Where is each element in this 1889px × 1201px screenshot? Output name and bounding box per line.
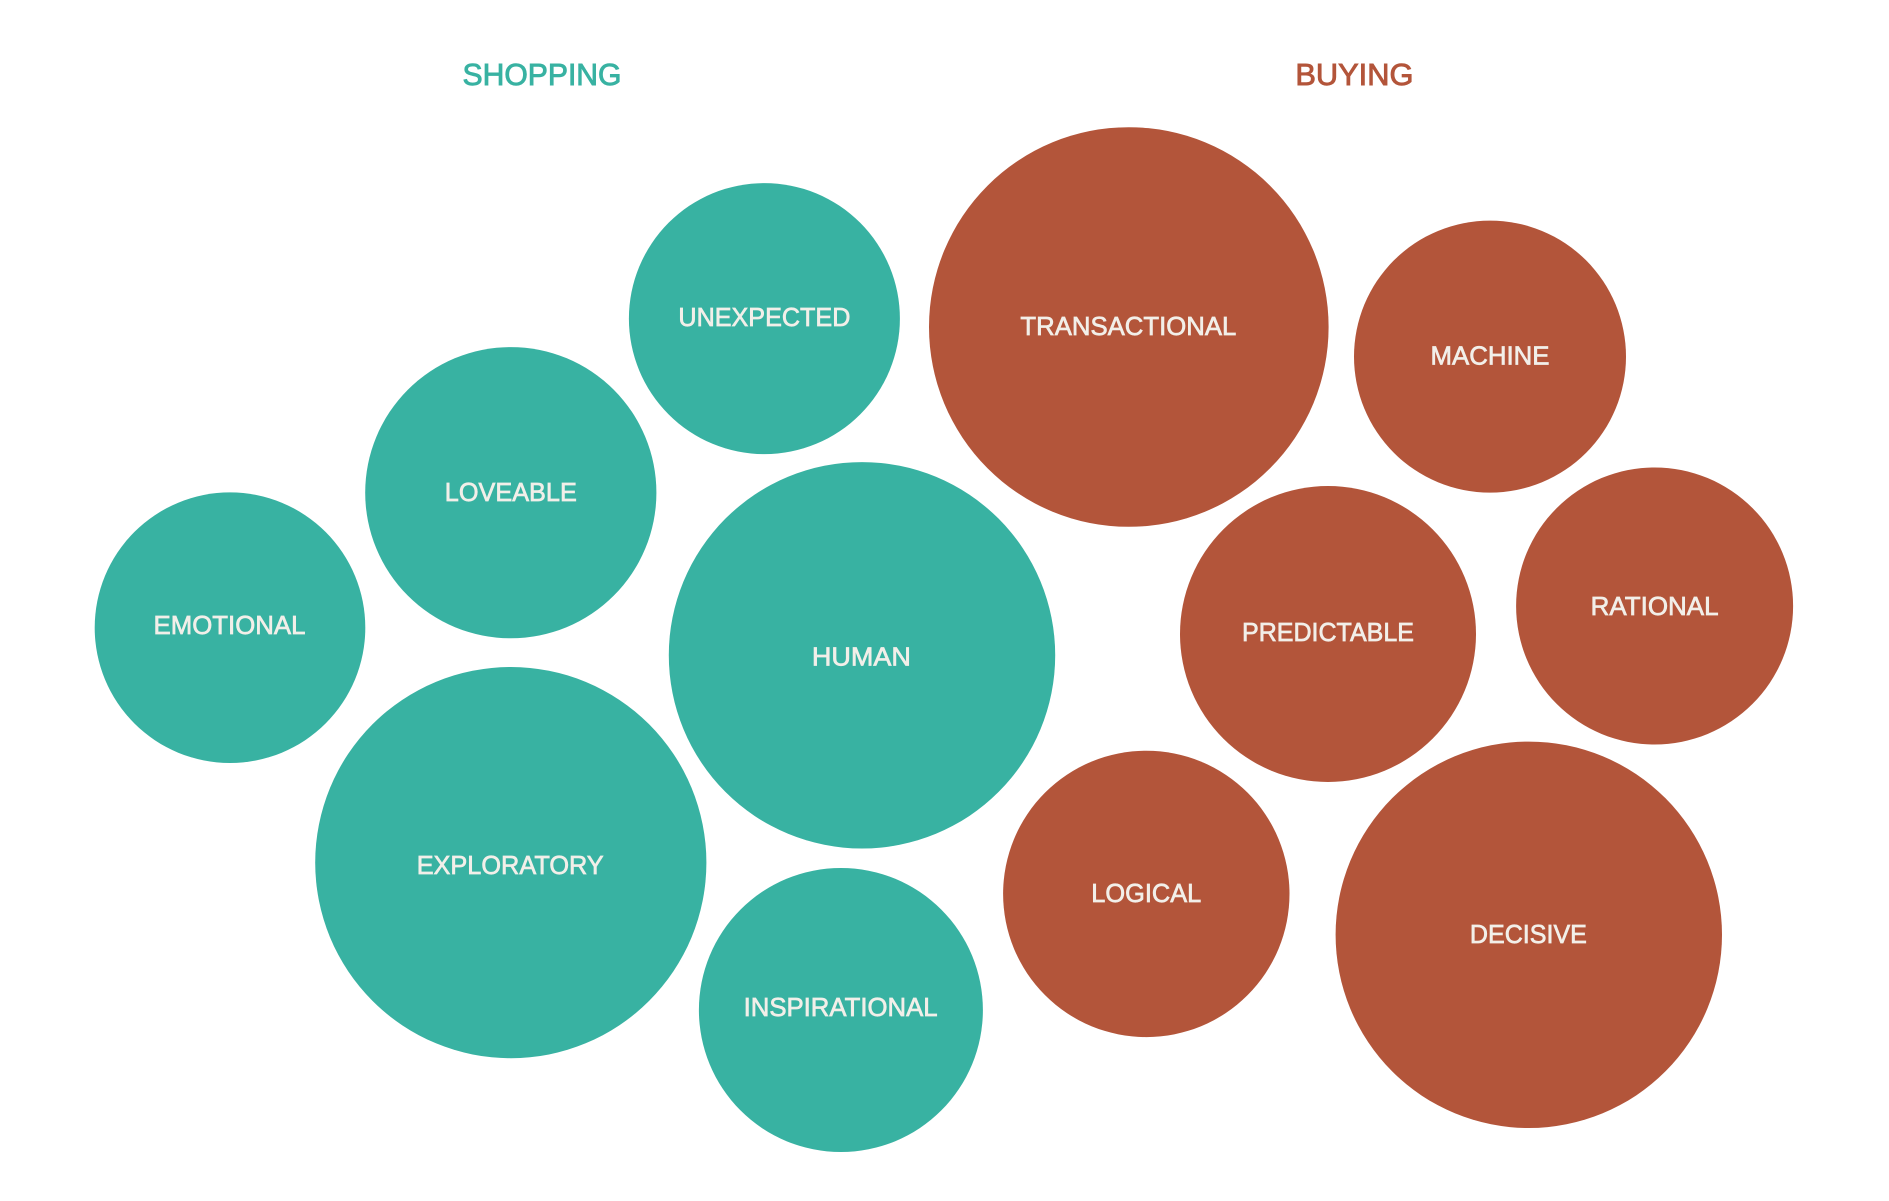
bubble: transactional bbox=[929, 127, 1329, 527]
bubble: decisive: DECISIVE bbox=[1470, 919, 1587, 949]
bubble: emotional: EMOTIONAL bbox=[154, 610, 306, 640]
bubble: transactional: TRANSACTIONAL bbox=[1020, 311, 1236, 341]
bubble: unexpected: UNEXPECTED bbox=[678, 302, 850, 332]
bubble: unexpected bbox=[629, 183, 900, 454]
bubble: inspirational: INSPIRATIONAL bbox=[744, 992, 938, 1022]
bubble: logical: LOGICAL bbox=[1091, 878, 1201, 908]
bubble: rational: RATIONAL bbox=[1591, 591, 1719, 621]
bubble: inspirational bbox=[699, 868, 983, 1152]
bubble: human: HUMAN bbox=[812, 642, 911, 672]
bubble: loveable bbox=[365, 347, 656, 638]
bubble: exploratory bbox=[315, 667, 706, 1058]
bubble: machine: MACHINE bbox=[1430, 340, 1550, 370]
bubble: rational bbox=[1516, 468, 1793, 744]
bubble: predictable: PREDICTABLE bbox=[1242, 617, 1414, 647]
bubble: emotional bbox=[95, 492, 365, 763]
heading: buying: BUYING bbox=[1295, 57, 1413, 92]
bubble: decisive bbox=[1336, 742, 1722, 1128]
bubble: human bbox=[669, 462, 1055, 848]
bubble: logical bbox=[1003, 751, 1290, 1037]
bubble: loveable: LOVEABLE bbox=[445, 477, 577, 507]
heading: shopping: SHOPPING bbox=[462, 57, 622, 92]
bubble: predictable bbox=[1180, 486, 1476, 782]
bubble: machine bbox=[1354, 221, 1626, 493]
bubble: exploratory: EXPLORATORY bbox=[417, 850, 604, 880]
